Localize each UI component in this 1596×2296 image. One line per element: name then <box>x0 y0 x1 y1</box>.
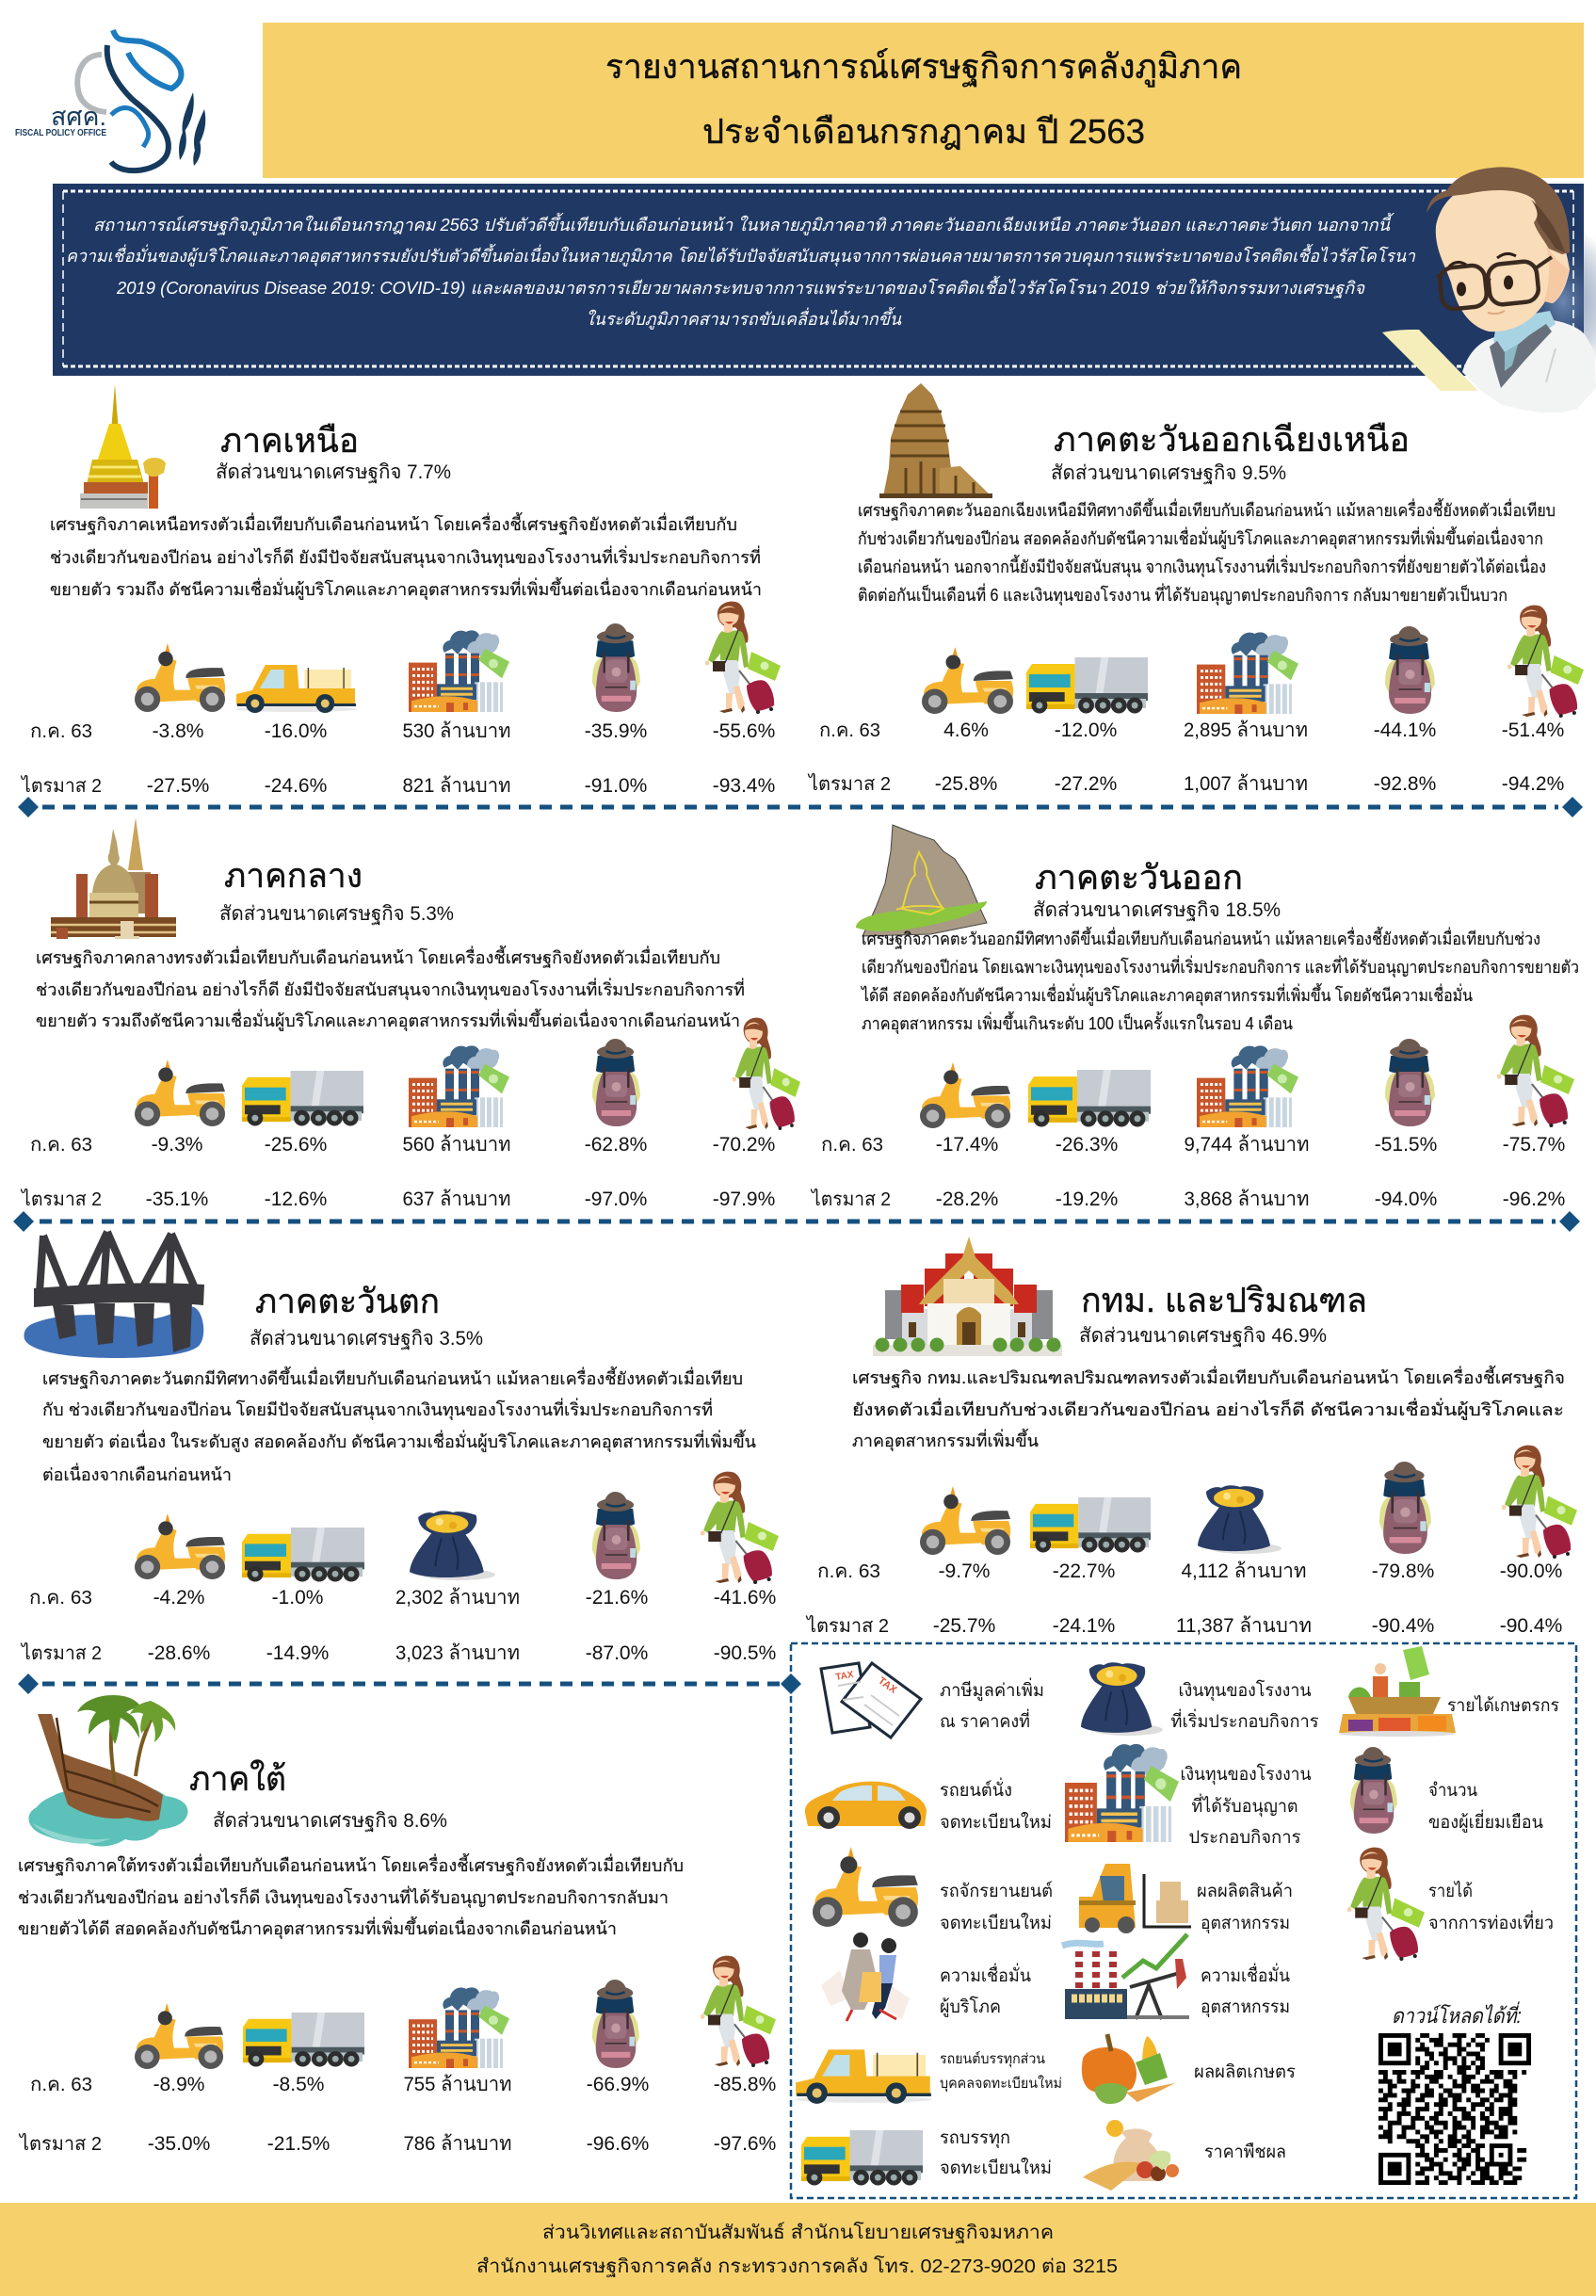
description: ขยายตัว รวมถึง ดัชนีความเชื่อมั่นผู้บริโภคและภาคอุตสาหกรรมที่เพิ่มขึ้นต่อเนื่องจากเดือนก่อนหน้า <box>50 577 762 600</box>
panel: northeast region <box>807 383 1584 795</box>
row: July 2020: 530 ล้านบาท <box>403 720 510 742</box>
economy share: สัดส่วนขนาดเศรษฐกิจ 8.6% <box>213 1810 447 1832</box>
summary text <box>66 212 1416 330</box>
row: Q2: -14.9% <box>266 1642 329 1664</box>
indicator icons <box>135 1018 800 1130</box>
row: Q2: -90.4% <box>1372 1615 1434 1637</box>
description <box>18 1853 684 1939</box>
row: July 2020: ก.ค. 63 <box>817 1561 880 1582</box>
row: July 2020: 2,895 ล้านบาท <box>1184 720 1308 741</box>
row: Q2: 821 ล้านบาท <box>403 775 510 797</box>
heading: กทม. และปริมณฑล <box>1081 1281 1367 1319</box>
panel: south region <box>18 1695 776 2155</box>
legend item: visitors <box>1350 1747 1543 1834</box>
divider: west band <box>18 1673 801 1694</box>
divider: north band <box>18 797 1583 817</box>
legend item: pickup: บุคคลจดทะเบียนใหม่ <box>940 2075 1062 2093</box>
legend item: consumer confidence: ความเชื่อมั่น <box>940 1963 1031 1986</box>
row: Q2: -90.4% <box>1500 1615 1562 1637</box>
row: Q2: -27.5% <box>147 775 209 797</box>
row: July 2020: -70.2% <box>713 1134 775 1156</box>
row: Q2: 786 ล้านบาท <box>403 2133 512 2155</box>
row: Q2: -12.6% <box>265 1188 327 1210</box>
download caption: ดาวน์โหลดได้ที่: <box>1392 2001 1522 2028</box>
row: Q2: 11,387 ล้านบาท <box>1176 1615 1312 1637</box>
description: ยังหดตัวเมื่อเทียบกับช่วงเดียวกันของปีก่อน อย่างไรก็ดี ดัชนีความเชื่อมั่นผู้บริโภคและ <box>852 1398 1564 1420</box>
description: เศรษฐกิจ กทม.และปริมณฑลปริมณฑลทรงตัวเมื่อเทียบกับเดือนก่อนหน้า โดยเครื่องชี้เศรษฐกิจ <box>852 1366 1565 1388</box>
row: Q2: -97.0% <box>585 1188 647 1210</box>
icon: longtail boat and palms <box>28 1695 187 1846</box>
legend item: motorcycle: รถจักรยานยนต์ <box>940 1881 1053 1901</box>
row: July 2020 <box>30 2074 776 2095</box>
legend item: truck: รถบรรทุก <box>940 2128 1010 2149</box>
row: Q2: -87.0% <box>586 1642 648 1664</box>
legend item: new factory capital: เงินทุนของโรงงาน <box>1179 1679 1312 1702</box>
row: Q2: -91.0% <box>585 775 647 797</box>
row: July 2020: -3.8% <box>153 720 203 742</box>
row: July 2020 <box>819 720 1564 741</box>
row: Q2: ไตรมาส 2 <box>805 1615 889 1637</box>
legend item: licensed factory capital: เงินทุนของโรงงาน <box>1181 1763 1312 1786</box>
description <box>50 512 762 600</box>
row: Q2: ไตรมาส 2 <box>20 1188 102 1210</box>
row: July 2020: -55.6% <box>713 720 775 742</box>
description: เศรษฐกิจภาคใต้ทรงตัวเมื่อเทียบกับเดือนก่อนหน้า โดยเครื่องชี้เศรษฐกิจยังหดตัวเมื่อเทียบกับ <box>18 1853 684 1876</box>
row: Q2: -24.6% <box>265 775 327 797</box>
row: July 2020: -85.8% <box>714 2074 776 2095</box>
row: July 2020 <box>821 1134 1565 1156</box>
economy share: สัดส่วนขนาดเศรษฐกิจ 18.5% <box>1033 899 1281 921</box>
row: Q2: -90.5% <box>714 1642 776 1664</box>
row: Q2 <box>805 1615 1562 1637</box>
indicator icons <box>920 1015 1574 1128</box>
description: ติดต่อกันเป็นเดือนที่ 6 และเงินทุนของโรงงาน ที่ได้รับอนุญาตประกอบกิจการ กลับมาขยายตัวเป็นบวก <box>858 583 1507 606</box>
row: Q2 <box>810 1188 1565 1210</box>
row: Q2 <box>20 775 775 797</box>
legend item: visitors: จำนวน <box>1428 1781 1477 1801</box>
legend item: passenger car: รถยนต์นั่ง <box>940 1777 1012 1801</box>
row: July 2020: -66.9% <box>587 2074 649 2095</box>
row: July 2020: ก.ค. 63 <box>30 2075 92 2095</box>
row: July 2020: -79.8% <box>1372 1560 1434 1582</box>
legend item: pickup: รถยนต์บรรทุกส่วน <box>940 2051 1045 2068</box>
legend item: VAT: TAX <box>876 1675 899 1696</box>
legend item: passenger car <box>805 1777 1052 1833</box>
legend item: farm income: รายได้เกษตรกร <box>1447 1695 1559 1716</box>
description: เศรษฐกิจภาคเหนือทรงตัวเมื่อเทียบกับเดือนก่อนหน้า โดยเครื่องชี้เศรษฐกิจยังหดตัวเมื่อเทียบกับ <box>50 512 737 535</box>
description <box>42 1366 756 1484</box>
row: July 2020 <box>817 1560 1562 1582</box>
legend item: industrial output: อุตสาหกรรม <box>1201 1914 1290 1934</box>
row: Q2: 1,007 ล้านบาท <box>1184 773 1308 795</box>
legend item: motorcycle: จดทะเบียนใหม่ <box>940 1913 1052 1933</box>
description <box>858 498 1556 606</box>
row: Q2: -35.0% <box>148 2133 210 2155</box>
row: Q2: -28.2% <box>936 1188 998 1210</box>
legend item: crop prices <box>1083 2120 1286 2191</box>
heading: ภาคตะวันออกเฉียงเหนือ <box>1054 420 1410 459</box>
panel: summary <box>53 184 1596 377</box>
row: July 2020: -22.7% <box>1053 1560 1115 1582</box>
panel: title banner <box>263 23 1584 178</box>
row: July 2020: ก.ค. 63 <box>30 721 92 742</box>
panel: footer <box>0 2203 1596 2296</box>
logo subtitle: FISCAL POLICY OFFICE <box>15 128 106 138</box>
legend item: visitors: ของผู้เยี่ยมเยือน <box>1428 1809 1543 1833</box>
row: Q2: -27.2% <box>1055 773 1117 795</box>
legend item: industrial confidence <box>1062 1934 1290 2019</box>
legend item: consumer confidence: ผู้บริโภค <box>940 1996 1001 2017</box>
description: ขยายตัว รวมถึงดัชนีความเชื่อมั่นผู้บริโภคและภาคอุตสาหกรรมที่เพิ่มขึ้นต่อเนื่องจากเดือนก่อนหน้า <box>36 1009 740 1031</box>
legend item: consumer confidence <box>821 1932 1031 2021</box>
logo: Fiscal Policy Office <box>15 30 205 170</box>
legend item: industrial output <box>1079 1864 1293 1934</box>
panel: central region <box>20 817 800 1210</box>
row: Q2: -25.8% <box>935 773 997 795</box>
row: Q2 <box>18 2133 776 2155</box>
title line 2: ประจำเดือนกรกฎาคม ปี 2563 <box>702 112 1145 151</box>
description: ภาคอุตสาหกรรม เพิ่มขึ้นเกินระดับ 100 เป็นครั้งแรกในรอบ 4 เดือน <box>862 1011 1293 1034</box>
row: Q2: ไตรมาส 2 <box>807 773 891 795</box>
row: July 2020: ก.ค. 63 <box>819 720 880 741</box>
legend item: industrial output: ผลผลิตสินค้า <box>1197 1882 1293 1901</box>
row: Q2 <box>20 1642 776 1664</box>
legend item: new factory capital <box>1081 1662 1318 1736</box>
row: July 2020 <box>30 1134 775 1156</box>
legend item: farm income <box>1339 1646 1559 1737</box>
row: Q2: ไตรมาส 2 <box>810 1188 891 1210</box>
legend item: licensed factory capital <box>1065 1744 1312 1848</box>
row: July 2020: 755 ล้านบาท <box>403 2074 512 2095</box>
row: Q2: 3,868 ล้านบาท <box>1185 1188 1309 1210</box>
row: Q2: ไตรมาส 2 <box>20 1642 102 1664</box>
legend item: licensed factory capital: ที่ได้รับอนุญาต <box>1192 1793 1298 1818</box>
row: Q2 <box>20 1188 775 1210</box>
legend item: tourism income: รายได้ <box>1428 1881 1473 1901</box>
panel: east region <box>810 825 1579 1210</box>
icon: rock Buddha <box>856 825 987 936</box>
panel: legend <box>791 1643 1576 2198</box>
summary text: ความเชื่อมั่นของผู้บริโภคและภาคอุตสาหกรรมยังปรับตัวดีขึ้นต่อเนื่องในหลายภูมิภาค โดยได้รับปัจจัยสนับสนุนจากการผ่อนคลายมาตรการควบคุมการแพร่ระบาดของโรคติดเชื้อไวรัสโคโรนา <box>66 243 1416 267</box>
heading: ภาคกลาง <box>224 856 363 895</box>
indicator icons <box>920 1446 1577 1559</box>
row: Q2: ไตรมาส 2 <box>18 2133 102 2155</box>
row: Q2: -94.2% <box>1502 773 1564 795</box>
row: July 2020 <box>29 1587 776 1609</box>
footer line 2: สำนักงานเศรษฐกิจการคลัง กระทรวงการคลัง โทร. 02-273-9020 ต่อ 3215 <box>476 2256 1118 2277</box>
legend item: motorcycle <box>813 1847 1053 1933</box>
icon: marble temple <box>873 1237 1062 1356</box>
economy share: สัดส่วนขนาดเศรษฐกิจ 7.7% <box>216 461 451 483</box>
row: July 2020: -1.0% <box>272 1587 323 1609</box>
icon: doctor character <box>1382 167 1596 412</box>
description <box>852 1366 1565 1451</box>
indicator icons <box>135 1472 779 1584</box>
footer line 1: ส่วนวิเทศและสถาบันสัมพันธ์ สำนักนโยบายเศรษฐกิจมหภาค <box>542 2222 1054 2243</box>
row: July 2020: -4.2% <box>153 1587 204 1609</box>
row: July 2020: -9.3% <box>152 1134 202 1156</box>
summary text: 2019 (Coronavirus Disease 2019: COVID-19) และผลของมาตรการเยียวยาผลกระทบจากการแพร่ระบาดของโรคติดเชื้อไวรัสโคโรนา 2019 ช่วยให้กิจกรรมทางเศรษฐกิจ <box>116 275 1365 299</box>
title line 1: รายงานสถานการณ์เศรษฐกิจการคลังภูมิภาค <box>605 47 1242 88</box>
description: ช่วงเดียวกันของปีก่อน อย่างไรก็ดี ยังมีปัจจัยสนับสนุนจากเงินทุนของโรงงานที่เริ่มประกอบกิจการที่ <box>36 978 745 1000</box>
row: Q2: 637 ล้านบาท <box>403 1188 510 1210</box>
description: ได้ดี สอดคล้องกับดัชนีความเชื่อมั่นผู้บริโภคและภาคอุตสาหกรรมที่เพิ่มขึ้น โดยดัชนีความเชื่อมั่น <box>860 983 1473 1006</box>
icon: golden stupa <box>80 384 166 509</box>
icon: Mon bridge over water <box>24 1232 204 1358</box>
description: เศรษฐกิจภาคกลางทรงตัวเมื่อเทียบกับเดือนก่อนหน้า โดยเครื่องชี้เศรษฐกิจยังหดตัวเมื่อเทียบกับ <box>36 946 720 968</box>
legend item: crop prices: ราคาพืชผล <box>1204 2142 1286 2162</box>
row: Q2: -24.1% <box>1053 1615 1115 1637</box>
row: July 2020: -75.7% <box>1503 1134 1565 1156</box>
row: Q2 <box>807 773 1564 795</box>
row: July 2020: -51.5% <box>1375 1134 1437 1156</box>
indicator icons <box>922 606 1584 718</box>
row: July 2020: -62.8% <box>585 1134 647 1156</box>
icon: Buddha at Sukhothai <box>51 817 176 939</box>
legend item: VAT: ภาษีมูลค่าเพิ่ม <box>940 1677 1044 1701</box>
row: July 2020: -8.5% <box>273 2074 324 2095</box>
row: July 2020: -26.3% <box>1056 1134 1118 1156</box>
row: July 2020: -25.6% <box>265 1134 327 1156</box>
legend item: VAT: TAX <box>835 1670 855 1683</box>
row: July 2020: -90.0% <box>1500 1560 1562 1582</box>
row: Q2: -94.0% <box>1375 1188 1437 1210</box>
legend item: new factory capital: ที่เริ่มประกอบกิจการ <box>1171 1708 1318 1732</box>
description: ช่วงเดียวกันของปีก่อน อย่างไรก็ดี ยังมีปัจจัยสนับสนุนจากเงินทุนของโรงงานที่เริ่มประกอบกิจการที่ <box>50 545 761 568</box>
legend item: VAT: ณ ราคาคงที่ <box>940 1708 1030 1732</box>
legend item: licensed factory capital: ประกอบกิจการ <box>1188 1828 1301 1848</box>
legend item: agricultural output: ผลผลิตเกษตร <box>1194 2062 1296 2082</box>
divider: central band <box>13 1211 1580 1232</box>
row: Q2: -93.4% <box>713 775 775 797</box>
economy share: สัดส่วนขนาดเศรษฐกิจ 5.3% <box>219 903 454 925</box>
row: July 2020: -41.6% <box>714 1587 776 1609</box>
panel: west region <box>20 1232 779 1664</box>
description: ช่วงเดียวกันของปีก่อน อย่างไรก็ดี เงินทุนของโรงงานที่ได้รับอนุญาตประกอบกิจการกลับมา <box>18 1885 669 1908</box>
row: Q2: -19.2% <box>1056 1188 1118 1210</box>
heading: ภาคใต้ <box>189 1759 286 1798</box>
row: July 2020: -51.4% <box>1502 720 1564 741</box>
description <box>36 946 745 1031</box>
economy share: สัดส่วนขนาดเศรษฐกิจ 46.9% <box>1079 1325 1327 1347</box>
row: Q2: -96.2% <box>1503 1188 1565 1210</box>
row: July 2020: -35.9% <box>585 720 647 742</box>
row: July 2020: -9.7% <box>939 1560 990 1582</box>
row: Q2: -97.6% <box>714 2133 776 2155</box>
legend item: tourism income: จากการท่องเที่ยว <box>1428 1910 1554 1933</box>
row: Q2: -96.6% <box>587 2133 649 2155</box>
row: July 2020: 4.6% <box>943 720 989 741</box>
legend item: industrial confidence: อุตสาหกรรม <box>1201 1997 1290 2018</box>
row: July 2020: -12.0% <box>1055 720 1117 741</box>
row: Q2: ไตรมาส 2 <box>20 775 102 797</box>
description <box>860 927 1579 1034</box>
row: Q2: -35.1% <box>146 1188 208 1210</box>
summary text: สถานการณ์เศรษฐกิจภูมิภาคในเดือนกรกฎาคม 2563 ปรับตัวดีขึ้นเทียบกับเดือนก่อนหน้า ในหลายภูมิภาคอาทิ ภาคตะวันออกเฉียงเหนือ ภาคตะวันออก และภาคตะวันตก นอกจากนี้ <box>93 212 1394 235</box>
legend item: VAT <box>821 1663 1044 1738</box>
legend item: passenger car: จดทะเบียนใหม่ <box>940 1812 1052 1833</box>
legend item: truck <box>801 2128 1052 2186</box>
row: July 2020: -16.0% <box>265 720 327 742</box>
description: เศรษฐกิจภาคตะวันตกมีทิศทางดีขึ้นเมื่อเทียบกับเดือนก่อนหน้า แม้หลายเครื่องชี้ยังหดตัวเมื่อเทียบ <box>42 1366 743 1389</box>
row: July 2020: -17.4% <box>936 1134 998 1156</box>
row: July 2020: -8.9% <box>153 2074 204 2095</box>
heading: ภาคตะวันตก <box>255 1282 440 1320</box>
row: July 2020 <box>30 720 775 742</box>
description: กับ ช่วงเดียวกันของปีก่อน โดยมีปัจจัยสนับสนุนจากเงินทุนของโรงงานที่เริ่มประกอบกิจการที่ <box>42 1398 713 1420</box>
row: July 2020: ก.ค. 63 <box>30 1135 92 1156</box>
row: July 2020: 2,302 ล้านบาท <box>395 1587 520 1609</box>
legend item: tourism income <box>1346 1848 1554 1961</box>
row: Q2: -25.7% <box>933 1615 995 1637</box>
indicator icons <box>135 602 781 714</box>
row: July 2020: ก.ค. 63 <box>821 1135 883 1156</box>
heading: ภาคตะวันออก <box>1035 858 1243 897</box>
row: July 2020: 4,112 ล้านบาท <box>1181 1560 1307 1582</box>
logo text: สศค. <box>51 103 106 131</box>
description: ต่อเนื่องจากเดือนก่อนหน้า <box>42 1463 232 1484</box>
economy share: สัดส่วนขนาดเศรษฐกิจ 9.5% <box>1051 462 1286 484</box>
icon: Khmer prasat <box>879 383 992 498</box>
row: July 2020: -44.1% <box>1374 720 1436 741</box>
legend item: industrial confidence: ความเชื่อมั่น <box>1201 1963 1290 1986</box>
row: July 2020: -21.6% <box>586 1587 648 1609</box>
description: เศรษฐกิจภาคตะวันออกมีทิศทางดีขึ้นเมื่อเทียบกับเดือนก่อนหน้า แม้หลายเครื่องชี้ยังหดตัวเมื่อเทียบกับช่วง <box>862 927 1540 949</box>
row: Q2: -28.6% <box>148 1642 210 1664</box>
panel: north region <box>20 384 781 797</box>
row: Q2: -21.5% <box>267 2133 330 2155</box>
description: ภาคอุตสาหกรรมที่เพิ่มขึ้น <box>852 1429 1039 1451</box>
summary text: ในระดับภูมิภาคสามารถขับเคลื่อนได้มากขึ้น <box>586 306 902 330</box>
row: Q2: -92.8% <box>1374 773 1436 795</box>
economy share: สัดส่วนขนาดเศรษฐกิจ 3.5% <box>250 1328 483 1350</box>
QR code <box>1378 2033 1531 2185</box>
legend item: pickup <box>795 2049 1062 2104</box>
legend item: agricultural output <box>1082 2034 1296 2104</box>
description: ขยายตัวได้ดี สอดคล้องกับดัชนีภาคอุตสาหกรรมที่เพิ่มขึ้นต่อเนื่องจากเดือนก่อนหน้า <box>18 1916 617 1939</box>
panel: Bangkok and vicinity <box>805 1237 1577 1637</box>
row: Q2: 3,023 ล้านบาท <box>395 1642 520 1664</box>
legend item: truck: จดทะเบียนใหม่ <box>940 2158 1052 2178</box>
row: July 2020: 560 ล้านบาท <box>403 1134 510 1156</box>
row: Q2: -97.9% <box>713 1188 775 1210</box>
heading: ภาคเหนือ <box>220 421 359 460</box>
row: July 2020: 9,744 ล้านบาท <box>1185 1134 1309 1156</box>
row: July 2020: ก.ค. 63 <box>29 1588 92 1609</box>
description: ขยายตัว ต่อเนื่อง ในระดับสูง สอดคล้องกับ ดัชนีความเชื่อมั่นผู้บริโภคและภาคอุตสาหกรรมที่เพิ่มขึ้น <box>42 1430 756 1452</box>
indicator icons <box>135 1956 776 2069</box>
